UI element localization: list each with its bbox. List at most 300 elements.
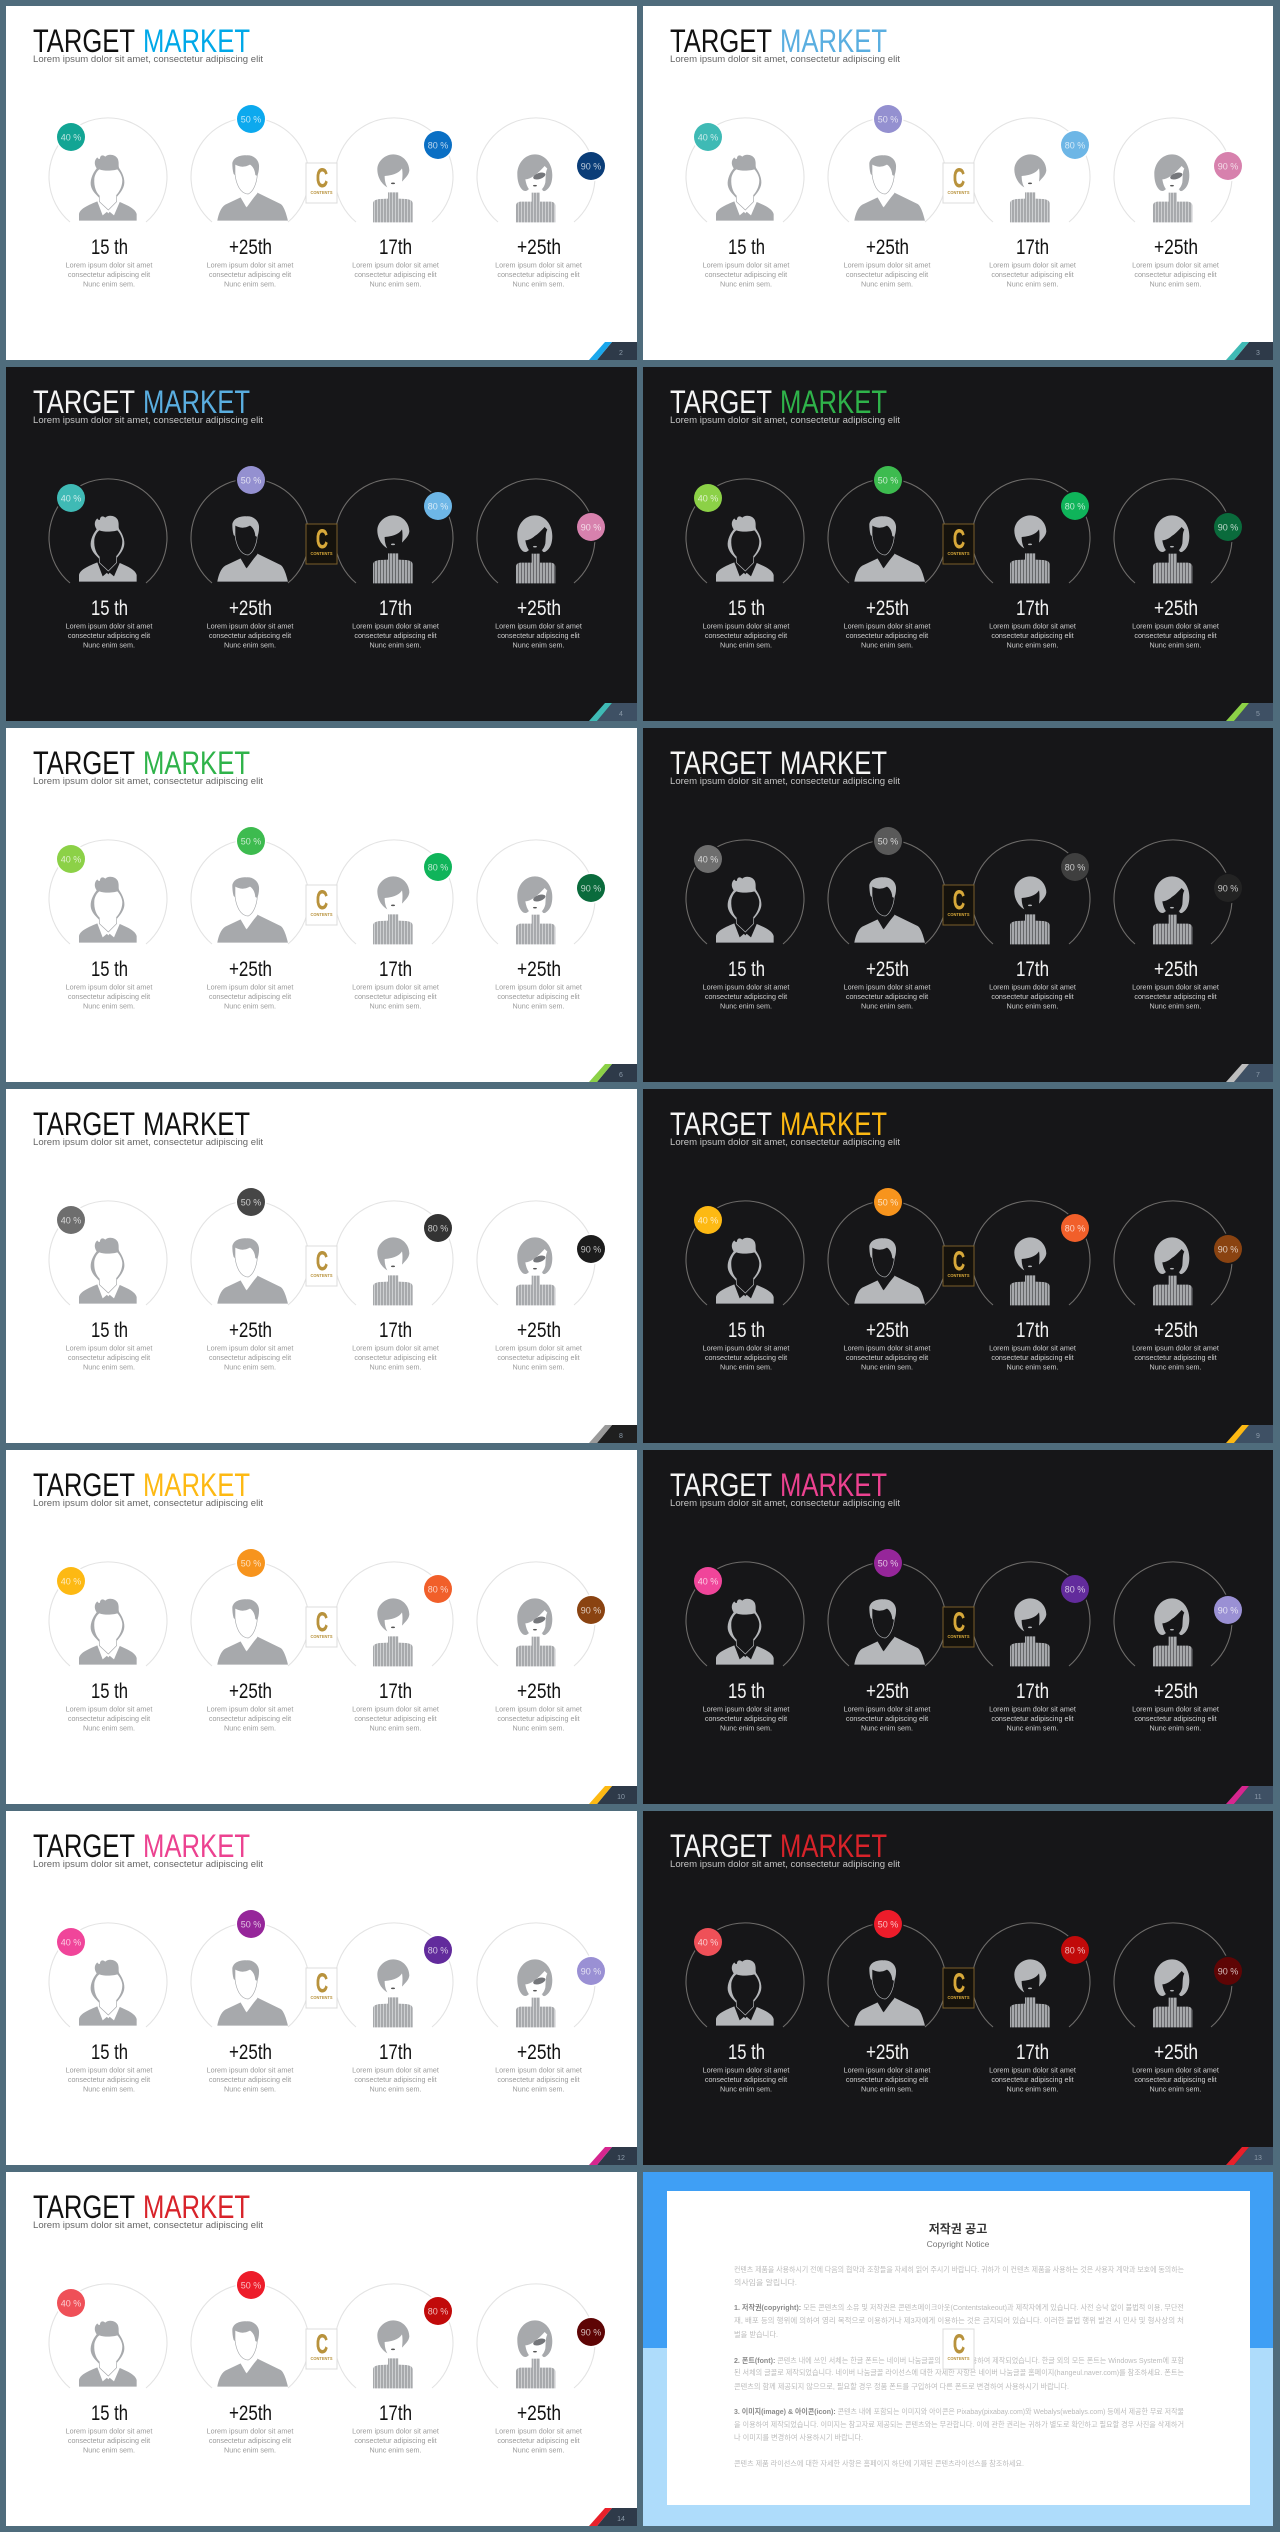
description: Nunc enim sem. bbox=[1007, 280, 1058, 288]
description: consectetur adipiscing elit bbox=[846, 992, 928, 1001]
persona: 17th bbox=[972, 1562, 1090, 1732]
watermark logo: C bbox=[953, 2329, 965, 2359]
description: Lorem ipsum dolor sit amet bbox=[66, 982, 152, 992]
persona: 15 th bbox=[49, 1923, 167, 2094]
age label: 15 th bbox=[728, 958, 765, 981]
description: Nunc enim sem. bbox=[224, 1724, 276, 1732]
ring bbox=[686, 1923, 804, 2027]
page number tag bbox=[589, 2147, 637, 2165]
description: Lorem ipsum dolor sit amet bbox=[1132, 1704, 1219, 1714]
icon: young man bbox=[716, 1960, 774, 2026]
notice section 1: copyright: 벌을 받습니다. bbox=[734, 2329, 778, 2339]
bubble: 80 %: 80 % bbox=[428, 502, 448, 512]
watermark logo bbox=[306, 524, 337, 564]
bubble: 80 %: 80 % bbox=[1065, 862, 1085, 872]
description bbox=[495, 1704, 582, 1732]
description: Nunc enim sem. bbox=[1007, 640, 1058, 650]
persona: 15 th bbox=[686, 1562, 804, 1732]
bubble: 90 %: 90 % bbox=[581, 1244, 601, 1254]
description: consectetur adipiscing elit bbox=[354, 2436, 437, 2445]
notice section 2: font: 된 서체의 글꼴로 제작되었습니다. 네이버 나눔글꼴 라이선스에 대한 자세한 사항은 네이버 나눔글꼴 홈페이지(hangeul.naver.com)를 참조하세요. 폰트는 bbox=[734, 2367, 1184, 2377]
age label: 17th bbox=[379, 1680, 412, 1703]
description: Lorem ipsum dolor sit amet bbox=[844, 1704, 930, 1714]
description bbox=[207, 2426, 293, 2454]
description bbox=[1132, 1704, 1219, 1732]
age label: +25th bbox=[866, 1319, 909, 1342]
bubble: 80 %: 80 % bbox=[1065, 1224, 1085, 1234]
subtitle: Lorem ipsum dolor sit amet, consectetur adipiscing elit bbox=[33, 776, 263, 787]
watermark logo: C bbox=[316, 1968, 328, 1998]
age label: +25th bbox=[1154, 958, 1198, 981]
title bbox=[670, 1106, 887, 1142]
persona: 17th bbox=[335, 1201, 453, 1372]
panel: slide 3 white soft blue bbox=[643, 6, 1273, 360]
watermark logo: C bbox=[953, 524, 965, 554]
panel: slide 12 white pink bbox=[6, 1811, 637, 2165]
title: MARKET bbox=[143, 23, 250, 59]
persona: 17th bbox=[335, 840, 453, 1010]
icon: man bbox=[217, 1238, 288, 1304]
description: Nunc enim sem. bbox=[370, 2446, 421, 2454]
bubble: 40 %: 40 % bbox=[698, 1216, 718, 1226]
description: consectetur adipiscing elit bbox=[846, 270, 928, 279]
ring bbox=[477, 1923, 595, 2027]
white notice card bbox=[667, 2191, 1250, 2505]
watermark logo: CONTENTS bbox=[310, 2356, 332, 2361]
bubble: 90 % bbox=[1214, 1596, 1242, 1624]
description: consectetur adipiscing elit bbox=[1134, 1353, 1217, 1362]
description bbox=[352, 982, 439, 1010]
watermark logo: C bbox=[953, 1968, 965, 1998]
page number tag: 4 bbox=[619, 711, 623, 718]
slide background bbox=[6, 367, 637, 721]
age label: 17th bbox=[1016, 1680, 1049, 1703]
description: consectetur adipiscing elit bbox=[68, 992, 150, 1001]
description: Lorem ipsum dolor sit amet bbox=[352, 982, 439, 992]
panel: slide 11 dark pink bbox=[643, 1450, 1273, 1804]
persona: 17th bbox=[972, 1923, 1090, 2094]
bubble: 90 % bbox=[577, 1235, 605, 1263]
bubble: 40 % bbox=[57, 2289, 85, 2317]
description bbox=[989, 622, 1076, 650]
persona: +25th man bbox=[191, 1910, 309, 2094]
title: TARGET bbox=[33, 23, 135, 59]
description: Lorem ipsum dolor sit amet bbox=[844, 1344, 930, 1352]
bubble: 50 % bbox=[874, 466, 902, 494]
bubble: 50 %: 50 % bbox=[241, 476, 261, 486]
description: Nunc enim sem. bbox=[1007, 1362, 1058, 1372]
description bbox=[495, 1344, 582, 1372]
bubble: 40 %: 40 % bbox=[698, 1576, 718, 1586]
bubble: 80 % bbox=[424, 853, 452, 881]
description: Nunc enim sem. bbox=[370, 280, 421, 288]
description: consectetur adipiscing elit bbox=[1134, 992, 1217, 1001]
icon: young man bbox=[716, 1238, 774, 1304]
bubble: 80 % bbox=[424, 131, 452, 159]
description: Lorem ipsum dolor sit amet bbox=[352, 622, 439, 630]
description: Lorem ipsum dolor sit amet bbox=[352, 260, 439, 270]
panel: slide 10 white orange bbox=[6, 1450, 637, 1804]
age label: +25th bbox=[229, 2041, 272, 2064]
description: Lorem ipsum dolor sit amet bbox=[703, 622, 789, 630]
icon: woman bbox=[1153, 515, 1192, 583]
description: Nunc enim sem. bbox=[861, 280, 913, 288]
description: Lorem ipsum dolor sit amet bbox=[844, 982, 930, 992]
persona: +25th man bbox=[191, 1188, 309, 1372]
bubble: 90 % bbox=[577, 152, 605, 180]
description: Lorem ipsum dolor sit amet bbox=[1132, 1344, 1219, 1352]
notice heading: 저작권 공고 bbox=[929, 2221, 987, 2236]
icon: man bbox=[854, 1599, 925, 1665]
ring bbox=[686, 840, 804, 944]
bubble: 90 % bbox=[577, 2318, 605, 2346]
persona: +25th woman bbox=[1114, 1201, 1242, 1372]
ring bbox=[686, 118, 804, 222]
description bbox=[703, 1344, 789, 1372]
persona: +25th woman bbox=[477, 1562, 605, 1732]
description: Nunc enim sem. bbox=[224, 2084, 276, 2094]
title bbox=[33, 1828, 250, 1864]
age label: 17th bbox=[1016, 236, 1049, 259]
bubble: 90 %: 90 % bbox=[581, 522, 601, 532]
bubble: 80 % bbox=[1061, 492, 1089, 520]
watermark logo: CONTENTS bbox=[948, 912, 970, 917]
age label: +25th bbox=[229, 1319, 272, 1342]
description: Nunc enim sem. bbox=[83, 640, 135, 650]
description: Nunc enim sem. bbox=[720, 1724, 772, 1732]
watermark logo: C bbox=[316, 885, 328, 915]
description: consectetur adipiscing elit bbox=[846, 1714, 928, 1723]
age label: +25th bbox=[1154, 2041, 1198, 2064]
description bbox=[66, 982, 152, 1010]
age label: +25th bbox=[517, 2041, 561, 2064]
page number tag: 11 bbox=[1254, 1794, 1262, 1801]
ring bbox=[1114, 1201, 1232, 1305]
bubble: 90 %: 90 % bbox=[1218, 1966, 1238, 1976]
description: consectetur adipiscing elit bbox=[846, 2075, 928, 2084]
bubble: 40 %: 40 % bbox=[698, 854, 718, 864]
description: consectetur adipiscing elit bbox=[497, 270, 580, 279]
description: consectetur adipiscing elit bbox=[705, 1353, 787, 1362]
persona: +25th man bbox=[191, 2271, 309, 2454]
persona: +25th man bbox=[828, 1910, 946, 2094]
description: Nunc enim sem. bbox=[513, 2084, 564, 2094]
persona: 17th bbox=[972, 118, 1090, 289]
persona: +25th woman bbox=[477, 479, 605, 650]
icon: young woman bbox=[373, 876, 413, 944]
watermark logo bbox=[306, 885, 337, 925]
description: Lorem ipsum dolor sit amet bbox=[207, 1704, 293, 1714]
description bbox=[844, 622, 930, 650]
description: Nunc enim sem. bbox=[513, 640, 564, 650]
bubble: 40 % bbox=[694, 123, 722, 151]
persona: 17th bbox=[972, 1201, 1090, 1372]
bubble: 40 %: 40 % bbox=[61, 1938, 81, 1948]
watermark logo: CONTENTS bbox=[948, 1634, 970, 1639]
icon: young woman bbox=[1010, 1598, 1050, 1666]
description: consectetur adipiscing elit bbox=[209, 631, 291, 640]
description: consectetur adipiscing elit bbox=[209, 992, 291, 1001]
title bbox=[670, 384, 887, 420]
watermark logo bbox=[306, 1968, 337, 2008]
page number tag: 10 bbox=[617, 1794, 625, 1801]
panel: slide 13 dark red bbox=[643, 1811, 1273, 2165]
icon: young man bbox=[79, 516, 137, 582]
icon: woman bbox=[1153, 1959, 1192, 2027]
slide background bbox=[6, 2172, 637, 2526]
description: Lorem ipsum dolor sit amet bbox=[844, 622, 930, 630]
ring bbox=[49, 479, 167, 583]
age label: 15 th bbox=[91, 958, 128, 981]
notice intro bbox=[734, 2264, 1184, 2287]
bubble: 80 % bbox=[1061, 1936, 1089, 1964]
description bbox=[844, 2066, 930, 2094]
icon: young woman bbox=[1010, 1959, 1050, 2027]
age label: 15 th bbox=[728, 2041, 765, 2064]
description bbox=[66, 260, 152, 288]
bubble: 50 %: 50 % bbox=[878, 1198, 898, 1208]
description: Nunc enim sem. bbox=[370, 640, 421, 650]
bubble: 80 %: 80 % bbox=[428, 2306, 448, 2316]
bubble: 90 % bbox=[1214, 1235, 1242, 1263]
persona: +25th man bbox=[191, 466, 309, 650]
description: consectetur adipiscing elit bbox=[354, 992, 437, 1001]
ring bbox=[477, 1562, 595, 1666]
ring bbox=[335, 1201, 453, 1305]
title bbox=[670, 745, 887, 781]
age label: 15 th bbox=[91, 1680, 128, 1703]
ring bbox=[686, 1201, 804, 1305]
description: Lorem ipsum dolor sit amet bbox=[352, 2426, 439, 2436]
icon: woman bbox=[516, 515, 555, 583]
icon: woman bbox=[516, 1237, 555, 1305]
description: consectetur adipiscing elit bbox=[68, 1353, 150, 1362]
description: Lorem ipsum dolor sit amet bbox=[495, 982, 582, 992]
page number tag bbox=[1226, 1064, 1273, 1082]
bubble: 50 % bbox=[237, 827, 265, 855]
notice section 3: image and icon: 을 이용하여 제작되었습니다. 이미지는 참고자료 제공되는 콘텐츠와는 무관합니다. 이에 관한 권리는 귀하가 별도로 확인하고 필요할 경우 사진을 삭제하거 bbox=[734, 2419, 1184, 2429]
description bbox=[989, 1344, 1076, 1372]
slide background bbox=[6, 728, 637, 1082]
bubble: 90 %: 90 % bbox=[581, 1606, 601, 1616]
bubble: 80 % bbox=[1061, 1575, 1089, 1603]
light blue background bottom bbox=[643, 2348, 1273, 2526]
icon: young man bbox=[716, 877, 774, 943]
description: consectetur adipiscing elit bbox=[209, 1714, 291, 1723]
slide background bbox=[643, 728, 1273, 1082]
ring bbox=[191, 840, 309, 944]
bubble: 40 % bbox=[57, 845, 85, 873]
bubble: 50 %: 50 % bbox=[241, 2280, 261, 2290]
description: Lorem ipsum dolor sit amet bbox=[844, 2066, 930, 2074]
bubble: 80 %: 80 % bbox=[428, 1584, 448, 1594]
description: Lorem ipsum dolor sit amet bbox=[495, 622, 582, 630]
bubble: 50 %: 50 % bbox=[241, 1198, 261, 1208]
icon: young woman bbox=[1010, 1237, 1050, 1305]
watermark logo bbox=[943, 1246, 974, 1286]
description: Lorem ipsum dolor sit amet bbox=[703, 982, 789, 992]
bubble: 40 % bbox=[57, 484, 85, 512]
description: Nunc enim sem. bbox=[861, 640, 913, 650]
description bbox=[352, 1344, 439, 1372]
bubble: 90 %: 90 % bbox=[581, 162, 601, 172]
age label: +25th bbox=[229, 1680, 272, 1703]
watermark logo: CONTENTS bbox=[948, 551, 970, 556]
icon: young woman bbox=[373, 154, 413, 222]
age label: +25th bbox=[517, 958, 561, 981]
description: Nunc enim sem. bbox=[720, 1002, 772, 1010]
description: Nunc enim sem. bbox=[224, 280, 276, 288]
notice section 1: copyright bbox=[734, 2302, 1184, 2339]
description: Nunc enim sem. bbox=[83, 1724, 135, 1732]
description: consectetur adipiscing elit bbox=[991, 1714, 1074, 1723]
description: Lorem ipsum dolor sit amet bbox=[989, 260, 1076, 270]
ring bbox=[1114, 1562, 1232, 1666]
ring bbox=[972, 840, 1090, 944]
notice section 1: copyright: 재, 배포 등의 행위에 의하여 영리 목적으로 이용하거나 제3자에게 이용하는 것은 금지되어 있습니다. 이러한 불법 행위 발견 시 민사 및 형사상의 처 bbox=[734, 2315, 1184, 2325]
description: consectetur adipiscing elit bbox=[209, 2075, 291, 2084]
description bbox=[495, 622, 582, 650]
description: Nunc enim sem. bbox=[513, 2446, 564, 2454]
description: Lorem ipsum dolor sit amet bbox=[495, 1704, 582, 1714]
age label: +25th bbox=[1154, 1680, 1198, 1703]
title bbox=[670, 1467, 887, 1503]
age label: 17th bbox=[379, 597, 412, 620]
page number tag: 2 bbox=[619, 350, 623, 357]
description: Nunc enim sem. bbox=[224, 2446, 276, 2454]
watermark logo: C bbox=[953, 885, 965, 915]
page number tag: 14 bbox=[617, 2516, 625, 2523]
description: consectetur adipiscing elit bbox=[991, 631, 1074, 640]
bubble: 90 %: 90 % bbox=[1218, 884, 1238, 894]
ring bbox=[49, 1923, 167, 2027]
ring bbox=[335, 2284, 453, 2388]
age label: 17th bbox=[1016, 958, 1049, 981]
icon: woman bbox=[516, 1598, 555, 1666]
description: Nunc enim sem. bbox=[1150, 640, 1201, 650]
persona: +25th woman bbox=[1114, 1923, 1242, 2094]
bubble: 50 % bbox=[874, 827, 902, 855]
age label: 15 th bbox=[728, 1680, 765, 1703]
description bbox=[495, 982, 582, 1010]
bubble: 40 %: 40 % bbox=[61, 494, 81, 504]
description: consectetur adipiscing elit bbox=[1134, 2075, 1217, 2084]
subtitle: Lorem ipsum dolor sit amet, consectetur adipiscing elit bbox=[33, 1859, 263, 1870]
description: consectetur adipiscing elit bbox=[705, 2075, 787, 2084]
age label: +25th bbox=[866, 2041, 909, 2064]
ring bbox=[191, 1201, 309, 1305]
bubble: 40 %: 40 % bbox=[698, 1938, 718, 1948]
ring bbox=[49, 2284, 167, 2388]
notice section 3: image and icon bbox=[734, 2406, 1184, 2442]
description: Nunc enim sem. bbox=[1150, 1362, 1201, 1372]
notice section 3: image and icon: 나 이미지를 변경하여 사용하시기 바랍니다. bbox=[734, 2432, 863, 2442]
title: TARGET bbox=[33, 1467, 135, 1503]
ring bbox=[335, 1562, 453, 1666]
title bbox=[670, 1828, 887, 1864]
description: consectetur adipiscing elit bbox=[497, 992, 580, 1001]
ring bbox=[477, 1201, 595, 1305]
description: Lorem ipsum dolor sit amet bbox=[207, 1344, 293, 1352]
persona: +25th man bbox=[191, 105, 309, 288]
icon: man bbox=[217, 1960, 288, 2026]
title: MARKET bbox=[780, 1467, 887, 1503]
bubble: 40 % bbox=[694, 1928, 722, 1956]
icon: young woman bbox=[373, 1598, 413, 1666]
description: Nunc enim sem. bbox=[513, 280, 564, 288]
ring bbox=[477, 118, 595, 222]
title bbox=[33, 745, 250, 781]
description: Nunc enim sem. bbox=[224, 640, 276, 650]
bubble: 50 %: 50 % bbox=[878, 836, 898, 846]
description: Lorem ipsum dolor sit amet bbox=[495, 260, 582, 270]
description: consectetur adipiscing elit bbox=[68, 631, 150, 640]
notice section 2: font bbox=[734, 2355, 1184, 2391]
description: Lorem ipsum dolor sit amet bbox=[989, 1344, 1076, 1352]
description: Nunc enim sem. bbox=[1150, 2084, 1201, 2094]
persona: 15 th bbox=[686, 1201, 804, 1372]
description bbox=[703, 622, 789, 650]
description: Nunc enim sem. bbox=[720, 640, 772, 650]
title: MARKET bbox=[780, 1828, 887, 1864]
slide background bbox=[6, 1811, 637, 2165]
description bbox=[989, 2066, 1076, 2094]
persona: 15 th bbox=[686, 840, 804, 1010]
title: TARGET bbox=[33, 384, 135, 420]
age label: +25th bbox=[866, 1680, 909, 1703]
title: TARGET bbox=[670, 1467, 772, 1503]
description bbox=[352, 1704, 439, 1732]
icon: young man bbox=[79, 155, 137, 221]
persona: 17th bbox=[335, 2284, 453, 2454]
description bbox=[66, 622, 152, 650]
slide background bbox=[6, 1450, 637, 1804]
bubble: 90 %: 90 % bbox=[1218, 522, 1238, 532]
description: Nunc enim sem. bbox=[1150, 280, 1201, 288]
description bbox=[1132, 982, 1219, 1010]
description: Lorem ipsum dolor sit amet bbox=[66, 260, 152, 270]
description: Nunc enim sem. bbox=[513, 1362, 564, 1372]
slide background bbox=[643, 367, 1273, 721]
title: TARGET bbox=[670, 23, 772, 59]
description: consectetur adipiscing elit bbox=[497, 1714, 580, 1723]
description: consectetur adipiscing elit bbox=[705, 631, 787, 640]
icon: man bbox=[854, 1960, 925, 2026]
description bbox=[989, 1704, 1076, 1732]
ring bbox=[828, 1562, 946, 1666]
bubble: 90 % bbox=[1214, 1957, 1242, 1985]
persona: +25th woman bbox=[477, 2284, 605, 2454]
description: consectetur adipiscing elit bbox=[991, 2075, 1074, 2084]
bubble: 50 % bbox=[237, 1910, 265, 1938]
description: Lorem ipsum dolor sit amet bbox=[703, 1344, 789, 1352]
title bbox=[33, 1467, 250, 1503]
icon: man bbox=[217, 2321, 288, 2387]
ring bbox=[335, 840, 453, 944]
ring bbox=[49, 840, 167, 944]
description: Lorem ipsum dolor sit amet bbox=[207, 260, 293, 270]
subtitle: Lorem ipsum dolor sit amet, consectetur adipiscing elit bbox=[33, 1498, 263, 1509]
persona: +25th woman bbox=[1114, 118, 1242, 289]
subtitle: Lorem ipsum dolor sit amet, consectetur adipiscing elit bbox=[670, 1498, 900, 1509]
description: Nunc enim sem. bbox=[370, 1724, 421, 1732]
icon: woman bbox=[516, 1959, 555, 2027]
bubble: 40 %: 40 % bbox=[698, 494, 718, 504]
ring bbox=[49, 118, 167, 222]
ring bbox=[477, 479, 595, 583]
watermark logo bbox=[943, 1968, 974, 2008]
panel: slide 9 dark orange bbox=[643, 1089, 1273, 1443]
